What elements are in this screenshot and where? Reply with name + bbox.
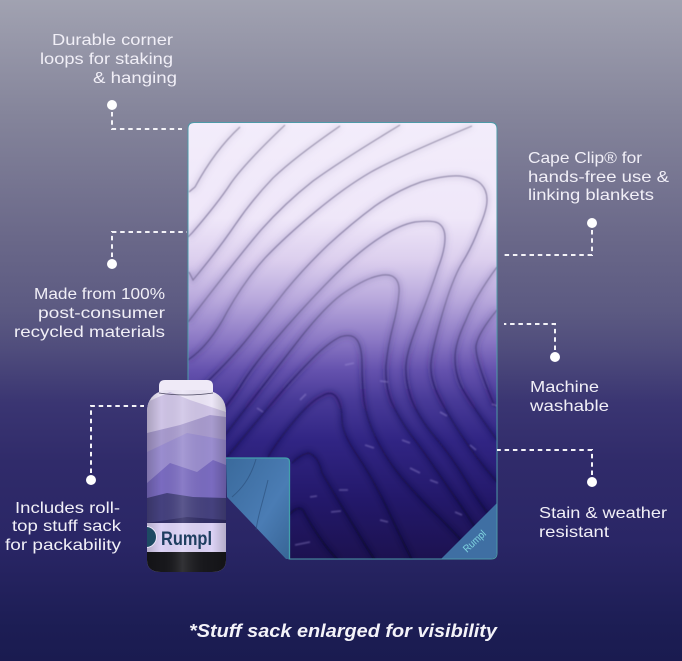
bottle base <box>147 552 226 572</box>
label band <box>147 523 226 552</box>
callout: corner loops: & hanging <box>93 70 177 87</box>
blanket <box>188 122 498 560</box>
callout: machine washable <box>504 324 609 415</box>
blanket body with gradient <box>188 122 498 560</box>
corner logo text: Rumpl <box>461 528 489 555</box>
callout: stuff sack: Includes roll- <box>15 500 120 517</box>
blanket teal border <box>188 122 498 560</box>
logo badge <box>147 526 157 548</box>
callout: stuff sack <box>5 406 144 554</box>
callout: stuff sack: top stuff sack <box>12 518 122 535</box>
bottle cap <box>159 380 213 394</box>
callout: cape clip: linking blankets <box>528 187 654 204</box>
callout: cape clip: Cape Clip® for <box>528 150 643 167</box>
corner logo patch <box>440 503 497 560</box>
quilting seams <box>188 125 497 560</box>
quilting shadow <box>188 125 497 560</box>
fabric highlights <box>257 363 497 545</box>
callout: cape clip: hands-free use & <box>528 169 669 186</box>
callout: cape clip <box>503 150 669 255</box>
callout: stain resistant <box>497 450 668 541</box>
callout: corner loops: loops for staking <box>40 51 173 68</box>
footnote: *Stuff sack enlarged for visibility <box>189 621 498 641</box>
bottle body <box>147 390 226 572</box>
callout: recycled materials: recycled materials <box>14 324 165 341</box>
callout: stain resistant: Stain & weather <box>539 505 668 522</box>
callout: corner loops: Durable corner <box>52 32 174 49</box>
callout: stain resistant: resistant <box>539 524 610 541</box>
bottle logo text: Rumpl <box>161 529 212 550</box>
callout: recycled materials <box>14 232 187 341</box>
callout: machine washable: Machine <box>530 379 599 396</box>
folded corner <box>226 458 290 559</box>
callout: stuff sack: for packability <box>5 537 121 554</box>
callout: recycled materials: post-consumer <box>38 305 166 322</box>
callout: recycled materials: Made from 100% <box>34 286 165 303</box>
callout: corner loops <box>40 32 182 129</box>
callout: machine washable: washable <box>529 398 609 415</box>
stuff sack bottle <box>147 380 226 572</box>
